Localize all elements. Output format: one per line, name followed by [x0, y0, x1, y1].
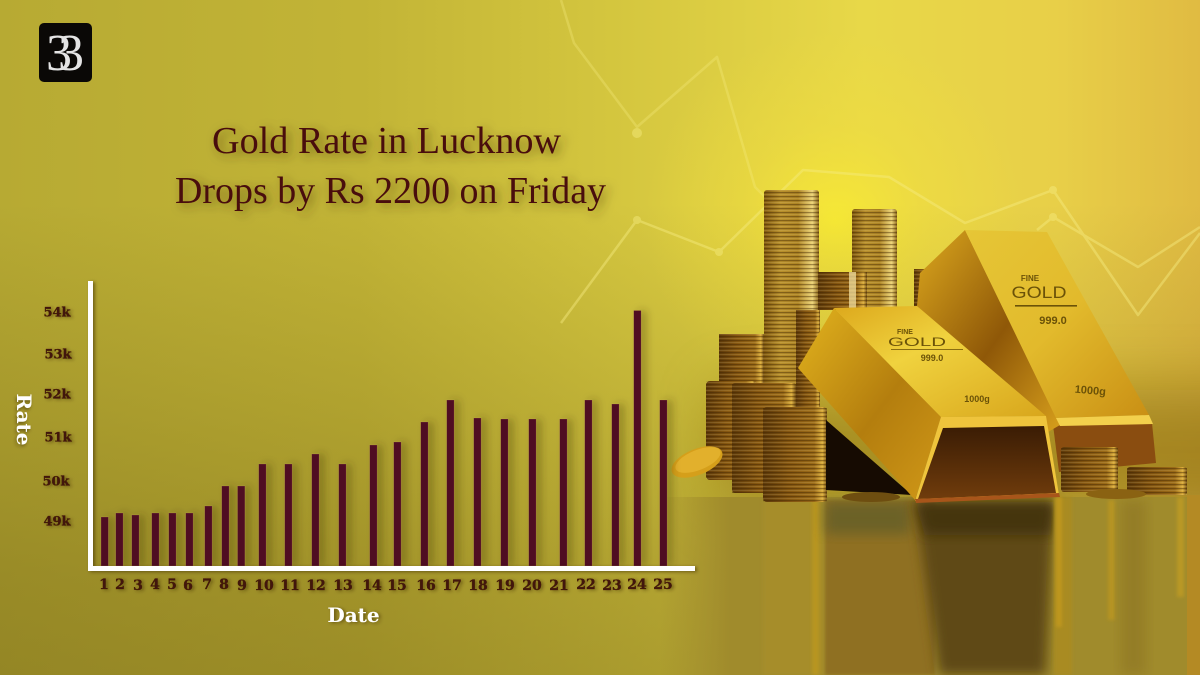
- x axis labels: 16: [416, 578, 436, 594]
- bars: [101, 310, 667, 566]
- y axis labels: 54k: [43, 306, 72, 320]
- coin stack: tall: [764, 190, 819, 390]
- x axis labels: 3: [133, 578, 143, 594]
- coin stack: mid dark: [796, 310, 820, 410]
- logo: [39, 23, 92, 82]
- x axis labels: 2: [115, 577, 125, 593]
- x axis labels: 8: [219, 577, 229, 593]
- gold bar back engraving: 1000g: [1074, 384, 1106, 398]
- y axis labels: 50k: [42, 474, 71, 490]
- x axis labels: 12: [306, 578, 326, 594]
- x axis labels: 4: [150, 577, 160, 593]
- title: [175, 120, 606, 212]
- gold bar front engraving: [888, 329, 990, 404]
- x axis labels: 25: [653, 577, 673, 593]
- x axis title: Date: [327, 603, 380, 627]
- x axis labels: 23: [602, 578, 622, 594]
- logo: 3: [46, 25, 72, 82]
- x axis labels: 10: [254, 578, 274, 594]
- x axis labels: [99, 577, 673, 594]
- y axis labels: 52k: [43, 388, 72, 402]
- x axis labels: 14: [362, 578, 382, 594]
- coin stack: middle: [818, 272, 867, 310]
- x axis labels: 6: [183, 578, 193, 594]
- x axis labels: 17: [442, 578, 462, 594]
- gold bar back engraving: 999.0: [1039, 315, 1067, 327]
- x axis labels: 15: [387, 578, 407, 594]
- x axis labels: 24: [627, 577, 647, 593]
- x axis labels: 13: [333, 578, 353, 594]
- x axis labels: 21: [549, 578, 569, 594]
- coin stack: behind back bar: [914, 269, 934, 309]
- x axis labels: 9: [237, 578, 247, 594]
- coin stack: front: [763, 407, 827, 502]
- coin stack: left short: [719, 334, 764, 384]
- y axis labels: [42, 306, 73, 530]
- background line chart decoration: [561, 0, 1200, 323]
- gold bar front engraving: FINE: [897, 329, 913, 336]
- coin stack: lower left: [706, 381, 756, 480]
- gold bar front engraving: 999.0: [921, 353, 943, 363]
- gold bar: back: [917, 230, 1156, 472]
- coin stack: lower middle: [732, 383, 796, 493]
- y axis labels: 49k: [43, 514, 72, 530]
- x axis labels: 5: [167, 577, 177, 593]
- gold coin stacks: [667, 190, 934, 502]
- gold bar: front: [798, 306, 1060, 503]
- gold bar front engraving: GOLD: [888, 335, 947, 349]
- gold bar back engraving: [1012, 274, 1106, 398]
- title: Drops by Rs 2200 on Friday: [175, 170, 606, 212]
- x axis labels: 20: [522, 578, 542, 594]
- y axis labels: 53k: [44, 348, 73, 362]
- axes: [88, 281, 695, 571]
- title: Gold Rate in Lucknow: [212, 120, 562, 162]
- floor reflection: [660, 495, 1200, 675]
- x axis labels: 11: [280, 578, 300, 594]
- gold bar front engraving: 1000g: [964, 394, 990, 404]
- gold bar back engraving: GOLD: [1012, 283, 1066, 302]
- x axis labels: 22: [576, 577, 596, 593]
- shadow under front bar: [826, 420, 912, 495]
- gold bar back engraving: FINE: [1021, 274, 1040, 283]
- x axis labels: 18: [468, 578, 488, 594]
- coin stack: second tall: [852, 209, 897, 309]
- icon: flat coin: [667, 440, 727, 484]
- small coin stacks right: [842, 447, 1187, 502]
- x axis labels: 7: [202, 577, 212, 593]
- y axis labels: 51k: [44, 430, 73, 446]
- x axis labels: 19: [495, 578, 515, 594]
- logo: 3: [58, 25, 84, 82]
- bar chart: [12, 281, 695, 627]
- y axis title: Rate: [12, 393, 36, 446]
- x axis labels: 1: [99, 577, 109, 593]
